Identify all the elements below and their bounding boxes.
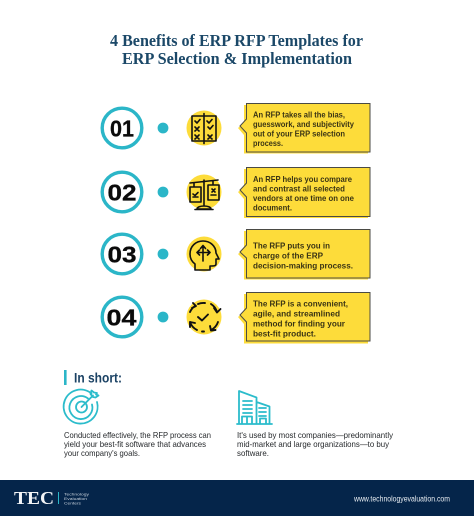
callout 4: agile, and streamlined xyxy=(253,308,340,318)
number badge 04: 04 xyxy=(106,304,136,330)
callout 1: guesswork, and subjectivity xyxy=(253,119,354,129)
callout 2: and contrast all selected xyxy=(253,184,345,194)
callout 2: vendors at one time on one xyxy=(253,193,354,203)
callout 4: best-fit product. xyxy=(253,328,316,338)
number badge 02 xyxy=(102,172,142,212)
website url: www.technologyevaluation.com xyxy=(353,494,450,504)
callout 1: process. xyxy=(253,138,283,148)
callout 4: method for finding your xyxy=(253,318,346,328)
callout 1: out of your ERP selection xyxy=(253,128,345,138)
callout 3 xyxy=(238,230,370,280)
connector dot 04 xyxy=(158,312,168,322)
text block: left summary xyxy=(64,430,211,458)
heading: in short: In short: xyxy=(74,370,122,386)
connector dot 03 xyxy=(158,249,168,259)
callout 1: An RFP takes all the bias, xyxy=(253,110,345,120)
number badge 02: 02 xyxy=(108,179,136,205)
callout 1 xyxy=(238,104,370,154)
icon: head with arrows xyxy=(186,236,222,272)
icon: checklist grid xyxy=(186,110,222,146)
text block: right summary: mid-market and large organizations—to buy xyxy=(237,439,390,449)
connector dot 01 xyxy=(158,123,168,133)
icon: target xyxy=(64,390,98,424)
number badge 01 xyxy=(102,108,142,148)
icon: balance scale xyxy=(186,174,222,210)
callout 2: document. xyxy=(253,202,292,212)
text block: right summary: It's used by most companies—predominantly xyxy=(237,430,394,440)
number badge 03 xyxy=(102,234,142,274)
number badge 01: 01 xyxy=(110,115,134,141)
icon: cycle arrows with check xyxy=(186,300,222,334)
callout 3: decision-making process. xyxy=(253,260,353,270)
text block: left summary: Conducted effectively, the RFP process can xyxy=(64,430,211,440)
text block: left summary: yield your best-fit software that advances xyxy=(64,439,206,449)
TEC logo: Technology xyxy=(64,492,89,496)
number badge 04 xyxy=(102,297,142,337)
title: 4 Benefits of ERP RFP Templates for xyxy=(110,31,363,50)
TEC logo: TEC xyxy=(14,488,54,508)
callout 4: The RFP is a convenient, xyxy=(253,298,348,308)
TEC logo: Evaluation xyxy=(64,496,87,501)
callout 4 xyxy=(238,292,370,344)
text block: left summary: your company's goals. xyxy=(64,448,140,458)
footer band xyxy=(0,480,474,516)
callout 2 xyxy=(238,168,370,218)
number badge 03: 03 xyxy=(108,241,136,267)
connector dot 02 xyxy=(158,187,168,197)
TEC logo: Centers xyxy=(64,500,81,506)
callout 2: An RFP helps you compare xyxy=(253,174,352,184)
callout 3: The RFP puts you in xyxy=(253,240,330,250)
text block: right summary xyxy=(237,430,394,458)
TEC logo xyxy=(14,488,89,508)
title: ERP Selection & Implementation xyxy=(122,49,353,68)
callout 3: charge of the ERP xyxy=(253,250,323,260)
text block: right summary: software. xyxy=(237,448,269,458)
icon: office buildings xyxy=(237,391,272,424)
title xyxy=(110,31,363,68)
